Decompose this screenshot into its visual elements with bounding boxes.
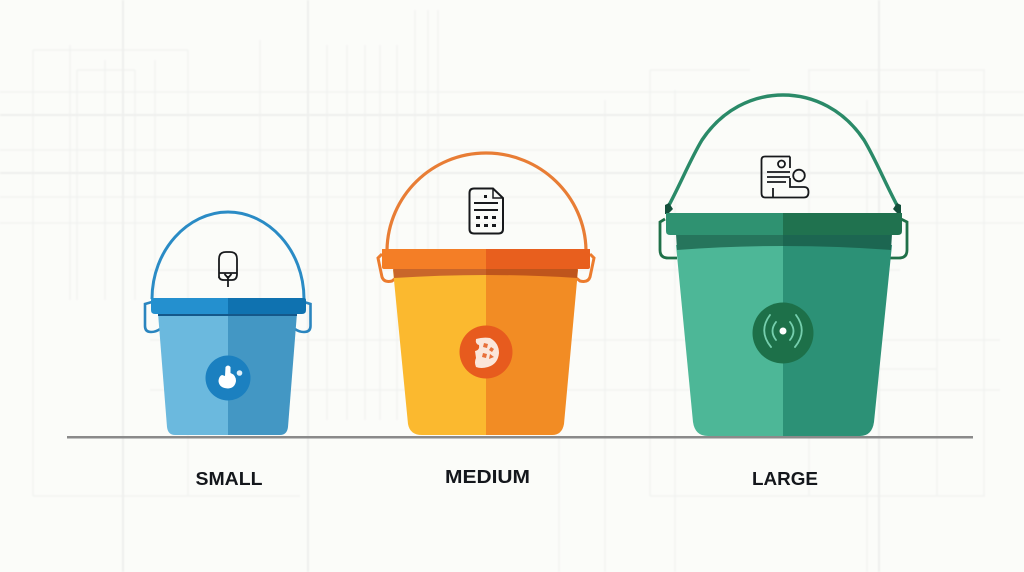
large bucket [660, 95, 907, 489]
medium label: MEDIUM [445, 467, 530, 487]
large bucket body [676, 245, 892, 436]
small bucket [145, 212, 310, 489]
small bucket ears [145, 302, 310, 332]
medium bucket badge [460, 326, 512, 378]
large bucket badge [752, 302, 814, 364]
large bucket ears [660, 219, 907, 258]
medium bucket handle [387, 153, 586, 250]
icon: certificate and scroll [762, 156, 808, 198]
small label: SMALL [196, 469, 262, 489]
large label: LARGE [752, 469, 818, 489]
small bucket handle [152, 212, 304, 299]
large bucket handle [668, 95, 898, 207]
icon: document [470, 188, 503, 234]
small bucket badge [206, 356, 250, 400]
medium bucket rim [382, 249, 590, 278]
small bucket body [158, 313, 297, 435]
medium bucket body [393, 270, 578, 435]
medium bucket [378, 153, 594, 487]
small bucket rim [151, 298, 306, 316]
icon: microphone [219, 252, 237, 287]
medium bucket ears [378, 254, 594, 282]
large bucket rim [666, 213, 902, 250]
large bucket handle pins [665, 203, 901, 214]
ground line [67, 436, 973, 438]
